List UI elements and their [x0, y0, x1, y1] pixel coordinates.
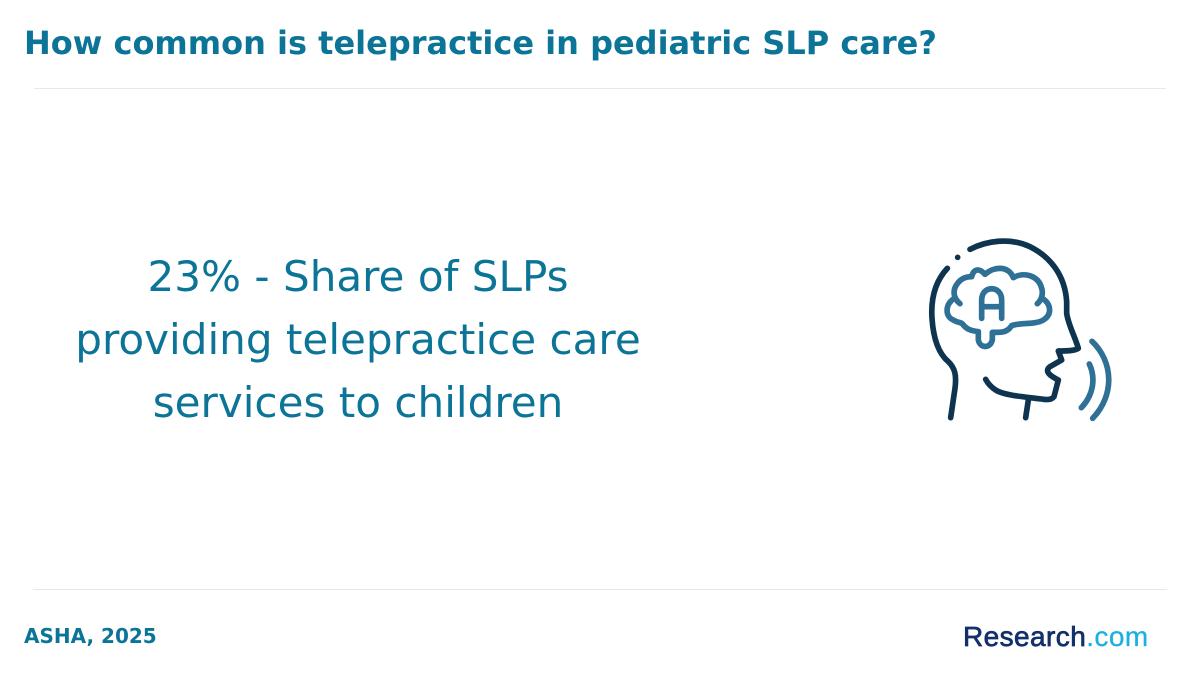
source: ASHA, 2025 — [24, 624, 157, 648]
speech waves — [1081, 341, 1109, 418]
statistic text — [75, 252, 641, 427]
title: How common is telepractice in pediatric SLP care? — [24, 24, 937, 62]
statistic text: services to children — [153, 378, 563, 427]
statistic text: 23% - Share of SLPs — [147, 252, 569, 301]
head outline — [932, 241, 1078, 418]
brain with letter A — [947, 268, 1050, 347]
logo: Research.com: Research.com — [963, 621, 1149, 652]
icon: head with brain and speech waves — [928, 238, 1112, 422]
statistic text: providing telepractice care — [75, 315, 641, 364]
